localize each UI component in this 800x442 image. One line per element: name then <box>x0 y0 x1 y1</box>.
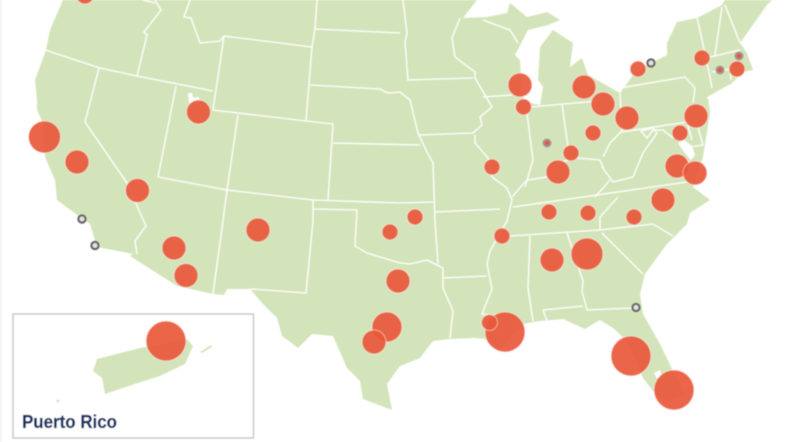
Philadelphia <box>684 104 708 128</box>
Los Angeles <box>78 215 86 223</box>
Cleveland <box>591 92 615 116</box>
Norfolk <box>683 161 707 185</box>
San Diego <box>91 242 99 249</box>
New Orleans <box>485 312 525 352</box>
Cincinnati <box>563 145 579 161</box>
Phoenix <box>162 236 186 260</box>
Baton Rouge <box>482 314 498 330</box>
Indianapolis <box>544 140 550 146</box>
Knoxville <box>580 205 596 221</box>
Boston <box>736 52 742 60</box>
St. Louis <box>484 159 500 175</box>
Detroit <box>572 75 596 99</box>
Columbus <box>585 125 601 141</box>
Tulsa <box>407 209 423 225</box>
Central California <box>65 150 89 174</box>
lakes and bays <box>188 93 695 379</box>
Louisville <box>546 160 570 184</box>
Miami <box>654 370 694 410</box>
Vieques island <box>200 345 212 353</box>
Raleigh <box>651 188 675 212</box>
San Francisco <box>28 121 60 153</box>
Washington <box>76 0 94 4</box>
Albuquerque <box>246 218 270 242</box>
Puerto Rico island <box>93 339 193 394</box>
Nashville <box>541 204 557 220</box>
Puerto Rico circle <box>146 321 186 361</box>
Atlanta <box>571 238 603 270</box>
state borders <box>45 0 743 338</box>
Tucson <box>174 264 198 288</box>
inset frame <box>13 314 254 438</box>
San Antonio <box>362 330 386 354</box>
panel: Puerto Rico inset <box>13 314 254 438</box>
Buffalo <box>630 61 646 77</box>
Tampa <box>611 336 651 376</box>
Las Vegas <box>126 178 150 202</box>
Pittsburgh <box>615 106 639 130</box>
inset label: Puerto Rico <box>22 412 117 432</box>
Memphis <box>494 228 510 244</box>
Baltimore <box>672 125 688 141</box>
Oklahoma City <box>382 224 398 240</box>
Hartford <box>716 66 724 74</box>
Houston area <box>372 312 402 342</box>
Albany <box>694 50 710 66</box>
Jacksonville <box>632 304 640 311</box>
Salt Lake City <box>186 100 210 124</box>
Mona island <box>56 400 60 402</box>
Rochester <box>647 59 655 67</box>
Birmingham <box>540 248 564 272</box>
Richmond <box>665 154 689 178</box>
Chicago <box>516 99 532 115</box>
Providence <box>729 61 745 77</box>
Charlotte <box>626 209 642 225</box>
Dallas <box>386 269 410 293</box>
Milwaukee <box>508 73 532 97</box>
